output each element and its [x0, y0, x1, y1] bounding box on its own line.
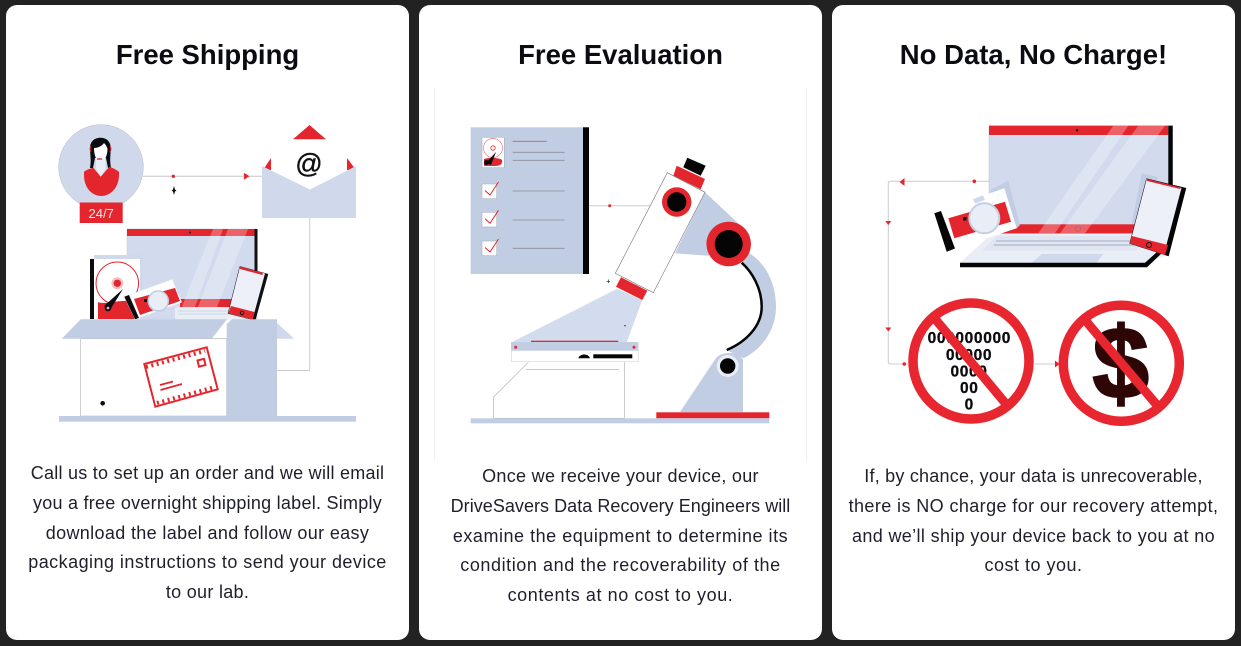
text block: free evaluation description: [451, 466, 790, 605]
panel: free shipping: [6, 5, 409, 640]
connector: no data to no charge: [1033, 360, 1060, 368]
text block: no data no charge description: there is NO charge for our recovery attempt,: [849, 496, 1218, 516]
icon: no data symbol: 00: [960, 380, 979, 397]
panel: free evaluation: [419, 5, 822, 640]
text block: free shipping description: packaging instructions to send your device: [28, 552, 387, 572]
icon: checkbox 1: [482, 182, 498, 199]
icon: phone: [1130, 179, 1186, 256]
icon: no data symbol: 0: [965, 396, 974, 414]
icon: hard drive thumbnail: [482, 137, 504, 168]
heading: free evaluation: Free Evaluation: [518, 39, 723, 70]
icon: email envelope: @: [295, 148, 323, 178]
connector: devices to no data: [885, 178, 989, 366]
text block: no data no charge description: cost to you.: [984, 555, 1083, 575]
icon: no data symbol: [913, 303, 1029, 419]
icon: no data symbol: 00000: [946, 347, 992, 364]
icon: email envelope: [262, 125, 356, 218]
text block: free evaluation description: contents at no cost to you.: [508, 585, 733, 605]
icon: no data symbol: 000000000: [928, 330, 1011, 347]
text block: free evaluation description: Once we receive your device, our: [482, 466, 759, 486]
connector: box to envelope: [277, 218, 310, 370]
icon: no data symbol: 0000: [950, 364, 988, 380]
panel: no data no charge: [832, 5, 1235, 640]
icon: support agent 24/7: [59, 125, 143, 223]
icon: checkbox 2: [482, 210, 498, 227]
icon: camera: [124, 279, 182, 319]
icon: shipping box: [59, 319, 356, 422]
text block: free shipping description: you a free overnight shipping label. Simply: [33, 493, 382, 513]
heading: free shipping: Free Shipping: [116, 39, 299, 70]
icon: support agent 24/7: 24/7: [89, 206, 114, 221]
text block: free shipping description: [28, 463, 387, 602]
illustration: no data no charge: [885, 126, 1186, 426]
connector: agent to envelope: [143, 173, 263, 195]
icon: no charge symbol: $: [1093, 308, 1149, 420]
icon: hard drive: [90, 255, 143, 319]
icon: camera: [934, 188, 1017, 252]
icon: shipping label: [144, 347, 218, 407]
icon: phone: [228, 267, 268, 320]
text block: no data no charge description: If, by chance, your data is unrecoverable,: [864, 466, 1203, 486]
image edge lines: [434, 88, 806, 460]
microscope: [471, 158, 776, 423]
text block: free shipping description: to our lab.: [166, 582, 249, 602]
icon: checkbox 3: [482, 239, 498, 256]
illustration: microscope evaluation: [434, 88, 807, 460]
text block: free evaluation description: examine the equipment to determine its: [453, 526, 788, 546]
connector: checklist to microscope: [589, 204, 652, 207]
checklist document: [471, 127, 589, 274]
icon: no charge symbol: [1063, 305, 1179, 421]
text block: free shipping description: download the label and follow our easy: [46, 522, 369, 542]
illustration: shipping workflow: [58, 124, 356, 422]
text block: free shipping description: Call us to set up an order and we will email: [31, 463, 384, 483]
text block: free evaluation description: condition and the recoverability of the: [460, 555, 781, 575]
text block: free evaluation description: DriveSavers Data Recovery Engineers will: [451, 496, 790, 516]
icon: laptop: [127, 229, 258, 320]
text block: no data no charge description: and we’ll ship your device back to you at no: [852, 526, 1215, 546]
heading: no data no charge: No Data, No Charge!: [900, 39, 1167, 70]
text block: no data no charge description: [848, 466, 1218, 575]
icon: laptop: [960, 126, 1173, 267]
